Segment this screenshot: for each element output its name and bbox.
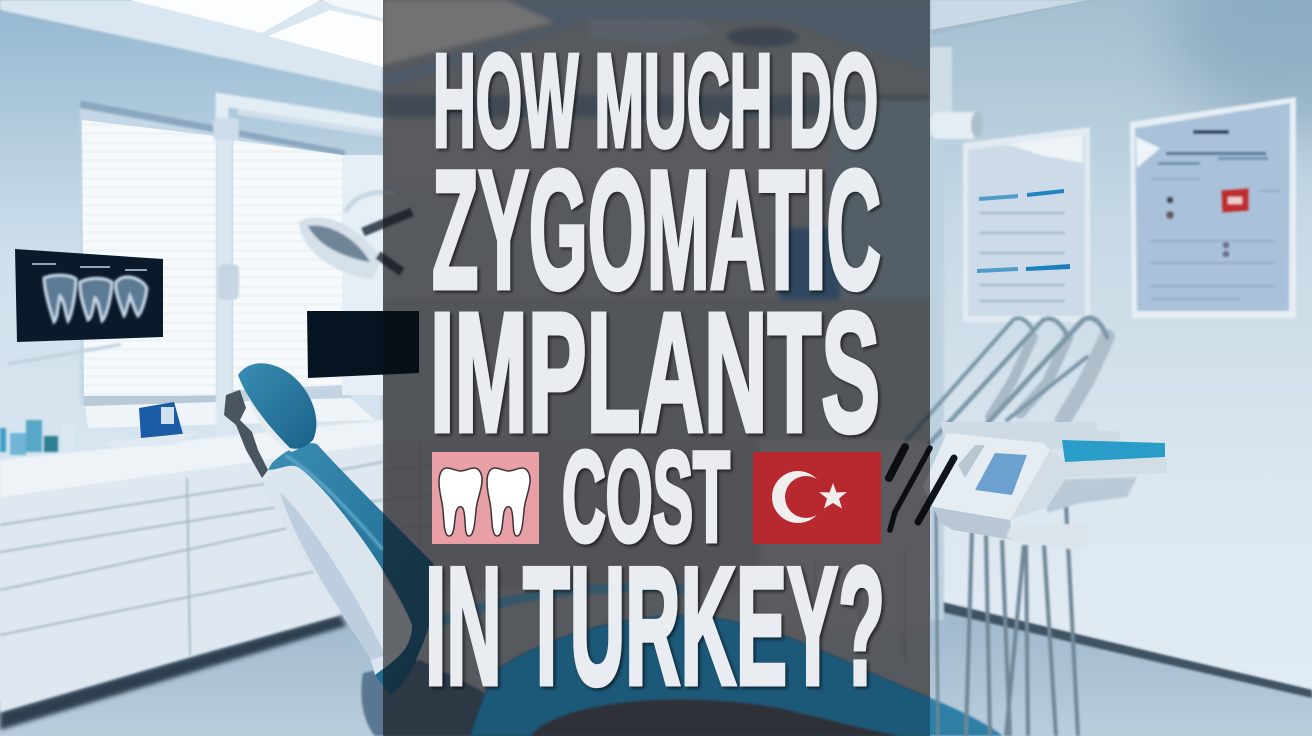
icon: Turkish flag [753,452,881,544]
shelf lines behind panel [383,440,905,660]
dental x-ray monitor [8,249,163,366]
icon: teeth [432,452,539,544]
title line 3: IMPLANTS [430,278,880,468]
handpieces [889,447,954,530]
dark translucent title panel [383,0,930,736]
small monitor [307,311,419,378]
dental chair [224,363,1003,736]
hoses [936,505,1078,736]
wall post and arm behind dental unit [930,47,983,620]
right wall posters [963,97,1296,322]
chair seat seen through panel [442,582,930,736]
dental lamp [299,192,412,279]
lamp arm post [213,100,383,435]
title: COST [562,426,730,569]
instrument arms [907,318,1107,453]
room behind the title panel [383,0,930,630]
window with blinds [80,100,383,428]
counter with supplies [0,402,383,498]
floors [0,600,1312,736]
unit body [923,422,1167,540]
handle [1006,523,1088,550]
blue tray [1062,440,1165,462]
title [425,27,885,720]
cabinets [0,445,383,712]
dental delivery unit [889,318,1167,736]
touch screen [975,453,1027,495]
